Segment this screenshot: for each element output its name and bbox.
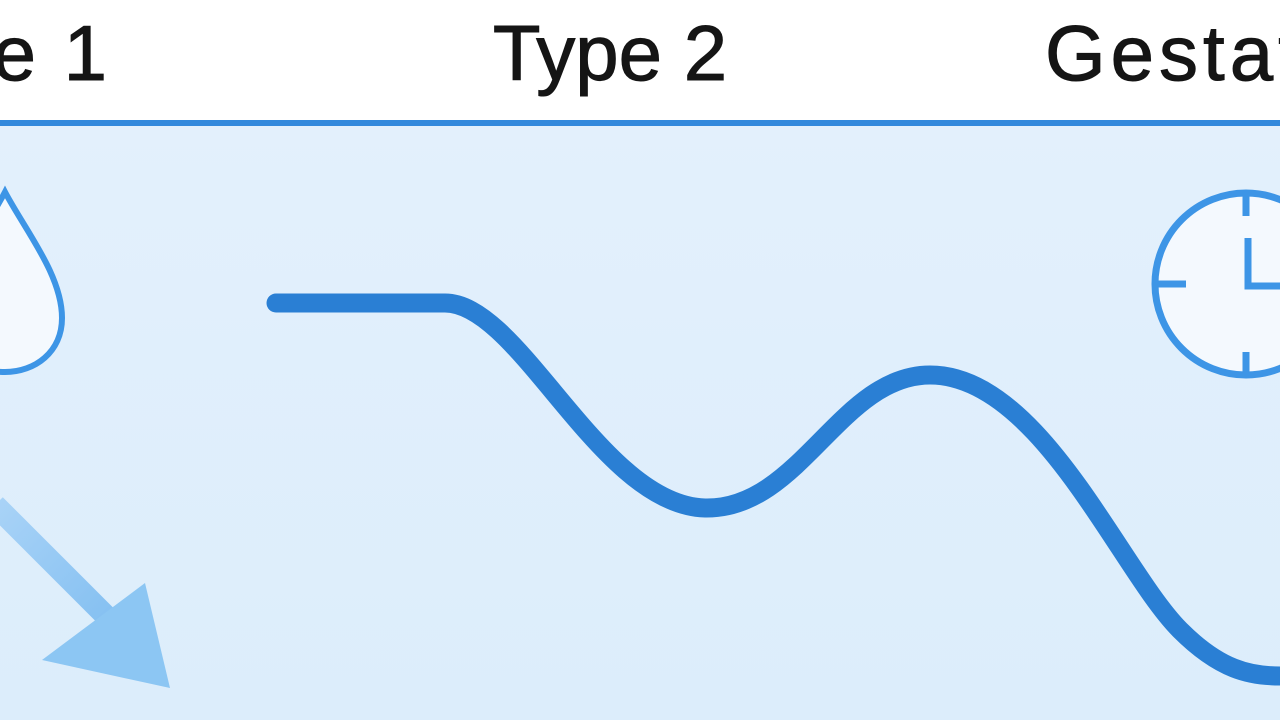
- heading: Type 2: Type 2: [493, 9, 727, 97]
- icon: clock: [1155, 193, 1280, 375]
- chart: glucose wave: [276, 303, 1280, 676]
- header: [0, 0, 1280, 121]
- header divider: [0, 120, 1280, 126]
- arrow: down right: [0, 505, 170, 688]
- icon: water drop: [0, 192, 62, 372]
